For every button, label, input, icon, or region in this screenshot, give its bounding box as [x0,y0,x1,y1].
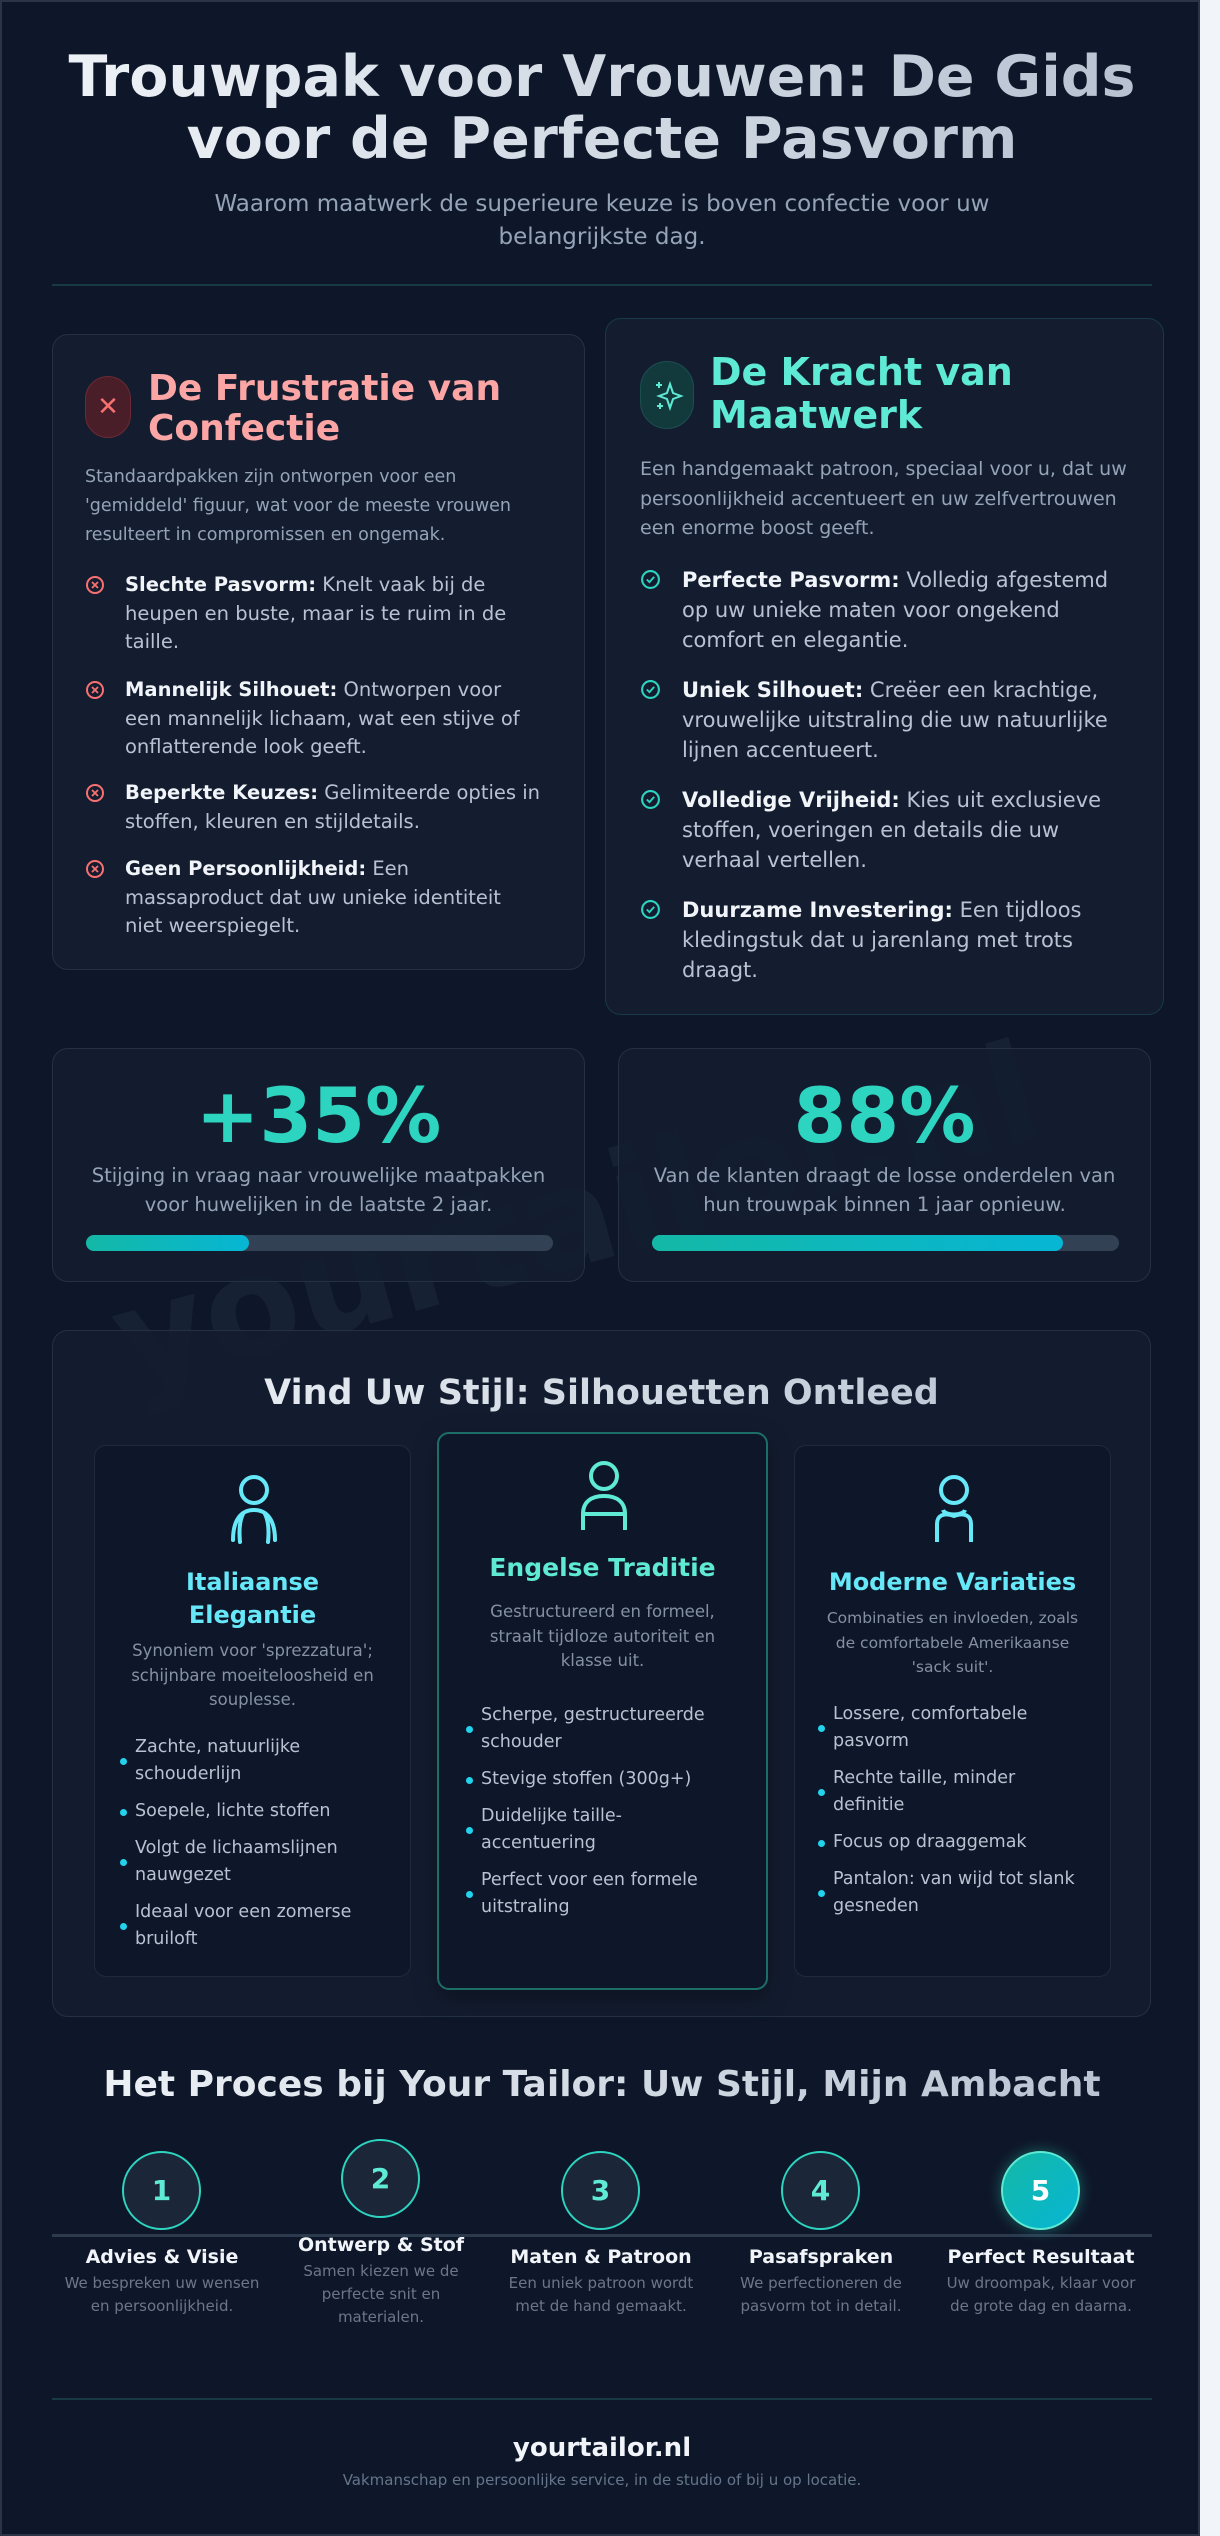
timeline: Maten & Patroon [510,2246,692,2268]
timeline: Uw droompak, klaar voor de grote dag en daarna. [947,2274,1135,2315]
card: engelse traditie: Duidelijke taille-accentuering [481,1806,622,1853]
list: Uniek Silhouet: Creëer een krachtige, vrouwelijke uitstraling die uw natuurlijke lijnen accentueert. [682,678,1108,762]
card: engelse traditie: Engelse Traditie [489,1553,716,1582]
card: italiaanse elegantie: Italiaanse [186,1568,319,1596]
step 5 [947,2144,1136,2315]
stat card: 88% [618,1048,1151,1282]
step 3 [509,2151,693,2315]
icon: sparkles [640,361,694,429]
panel: kracht van maatwerk [605,318,1164,1015]
step 2 [298,2139,464,2326]
timeline: 5 [1031,2174,1050,2207]
process heading: Het Proces bij Your Tailor: Uw Stijl, Mijn Ambacht [103,2064,1101,2105]
footer: Vakmanschap en persoonlijke service, in de studio of bij u op locatie. [343,2471,861,2489]
section heading: Vind Uw Stijl: Silhouetten Ontleed [264,1373,939,1413]
section heading [53,1371,1150,1415]
card: italiaanse elegantie [94,1445,411,1977]
progress bar [652,1235,1119,1251]
card: engelse traditie: Gestructureerd en formeel, straalt tijdloze autoriteit en klasse uit. [490,1602,715,1670]
footer [343,2433,861,2489]
timeline: Ontwerp & Stof [298,2234,464,2256]
title: voor de Perfecte Pasvorm [187,106,1017,172]
stat card: +35%: Stijging in vraag naar vrouwelijke maatpakken voor huwelijken in de laatste 2 jaar. [92,1164,545,1216]
card: moderne variaties: Lossere, comfortabele pasvorm [833,1704,1027,1751]
timeline: Perfect Resultaat [948,2246,1134,2268]
timeline: Een uniek patroon wordt met de hand gemaakt. [509,2274,693,2315]
heading [710,350,1013,437]
description: Een handgemaakt patroon, speciaal voor u, dat uw persoonlijkheid accentueert en uw zelfvertrouwen een enorme boost geeft. [640,458,1127,539]
timeline: 2 [371,2162,390,2195]
list: Geen Persoonlijkheid: Een massaproduct dat uw unieke identiteit niet weerspiegelt. [125,857,501,937]
icon: cross: ✕ [97,392,119,422]
panel: frustratie van confectie [52,334,585,970]
watermark: yourtailor.nl [95,1011,1057,1422]
icon: person soft shoulders [231,1475,277,1544]
timeline: Pasafspraken [749,2246,893,2268]
title: Trouwpak voor Vrouwen: De Gids [69,44,1135,110]
subtitle: Waarom maatwerk de superieure keuze is boven confectie voor uw belangrijkste dag. [215,191,989,250]
stat card: +35% [52,1048,585,1282]
stat card: +35%: +35% [196,1071,441,1160]
panel: silhouetten [52,1330,1151,2017]
step 4 [740,2151,902,2315]
heading: Maatwerk [710,393,922,437]
icon: cross [85,376,131,438]
heading [148,368,501,449]
card: italiaanse elegantie: Synoniem voor 'sprezzatura'; schijnbare moeiteloosheid en souplesse. [131,1641,374,1709]
list: Volledige Vrijheid: Kies uit exclusieve stoffen, voeringen en details die uw verhaal vertellen. [682,788,1101,872]
icon: person relaxed [935,1475,973,1542]
list: Perfecte Pasvorm: Volledig afgestemd op uw unieke maten voor ongekend comfort en elegantie. [682,568,1108,652]
card: italiaanse elegantie: Zachte, natuurlijke schouderlijn [135,1737,300,1784]
step 1 [65,2151,259,2315]
stat card: 88%: Van de klanten draagt de losse onderdelen van hun trouwpak binnen 1 jaar opnieuw. [654,1164,1115,1216]
card: italiaanse elegantie: Volgt de lichaamslijnen nauwgezet [135,1838,338,1885]
heading: De Frustratie van [148,368,501,409]
list [641,568,1108,982]
card: engelse traditie: Perfect voor een formele uitstraling [481,1870,698,1917]
card: italiaanse elegantie: Ideaal voor een zomerse bruiloft [135,1902,351,1949]
timeline: 1 [152,2174,171,2207]
list: Duurzame Investering: Een tijdloos kledingstuk dat u jarenlang met trots draagt. [682,898,1082,982]
icon: person structured shoulders [581,1461,627,1530]
list: Slechte Pasvorm: Knelt vaak bij de heupen en buste, maar is te ruim in de taille. [125,573,506,653]
list: Mannelijk Silhouet: Ontworpen voor een mannelijk lichaam, wat een stijve of onflatterende look geeft. [125,678,520,758]
timeline: Samen kiezen we de perfecte snit en materialen. [303,2262,459,2326]
timeline: We bespreken uw wensen en persoonlijkheid. [65,2274,259,2315]
title [2,46,1202,170]
card: moderne variaties [794,1445,1111,1977]
card: italiaanse elegantie: Elegantie [189,1601,316,1629]
timeline: We perfectioneren de pasvorm tot in detail. [740,2274,902,2315]
timeline: Advies & Visie [86,2246,238,2268]
card: moderne variaties: Pantalon: van wijd tot slank gesneden [833,1869,1075,1916]
list [86,573,540,937]
card: moderne variaties: Combinaties en invloeden, zoals de comfortabele Amerikaanse 'sack suit'. [827,1609,1078,1676]
progress bar [86,1235,553,1251]
card: engelse traditie: Stevige stoffen (300g+) [481,1769,691,1789]
heading: De Kracht van [710,350,1013,394]
card: moderne variaties: Moderne Variaties [829,1568,1076,1596]
list: Beperkte Keuzes: Gelimiteerde opties in stoffen, kleuren en stijldetails. [125,781,540,832]
timeline: 4 [811,2174,830,2207]
description: Standaardpakken zijn ontworpen voor een 'gemiddeld' figuur, wat voor de meeste vrouwen resulteert in compromissen en ongemak. [85,467,511,545]
card: engelse traditie: Scherpe, gestructureerde schouder [481,1705,705,1752]
stat card: 88%: 88% [794,1071,975,1160]
card: moderne variaties: Focus op draaggemak [833,1832,1027,1852]
card: engelse traditie [437,1432,768,1990]
timeline [52,2139,1152,2326]
footer: yourtailor.nl [513,2433,691,2463]
heading: Confectie [148,408,340,449]
card: italiaanse elegantie: Soepele, lichte stoffen [135,1801,330,1821]
card: moderne variaties: Rechte taille, minder definitie [833,1768,1015,1815]
timeline: 3 [591,2174,610,2207]
